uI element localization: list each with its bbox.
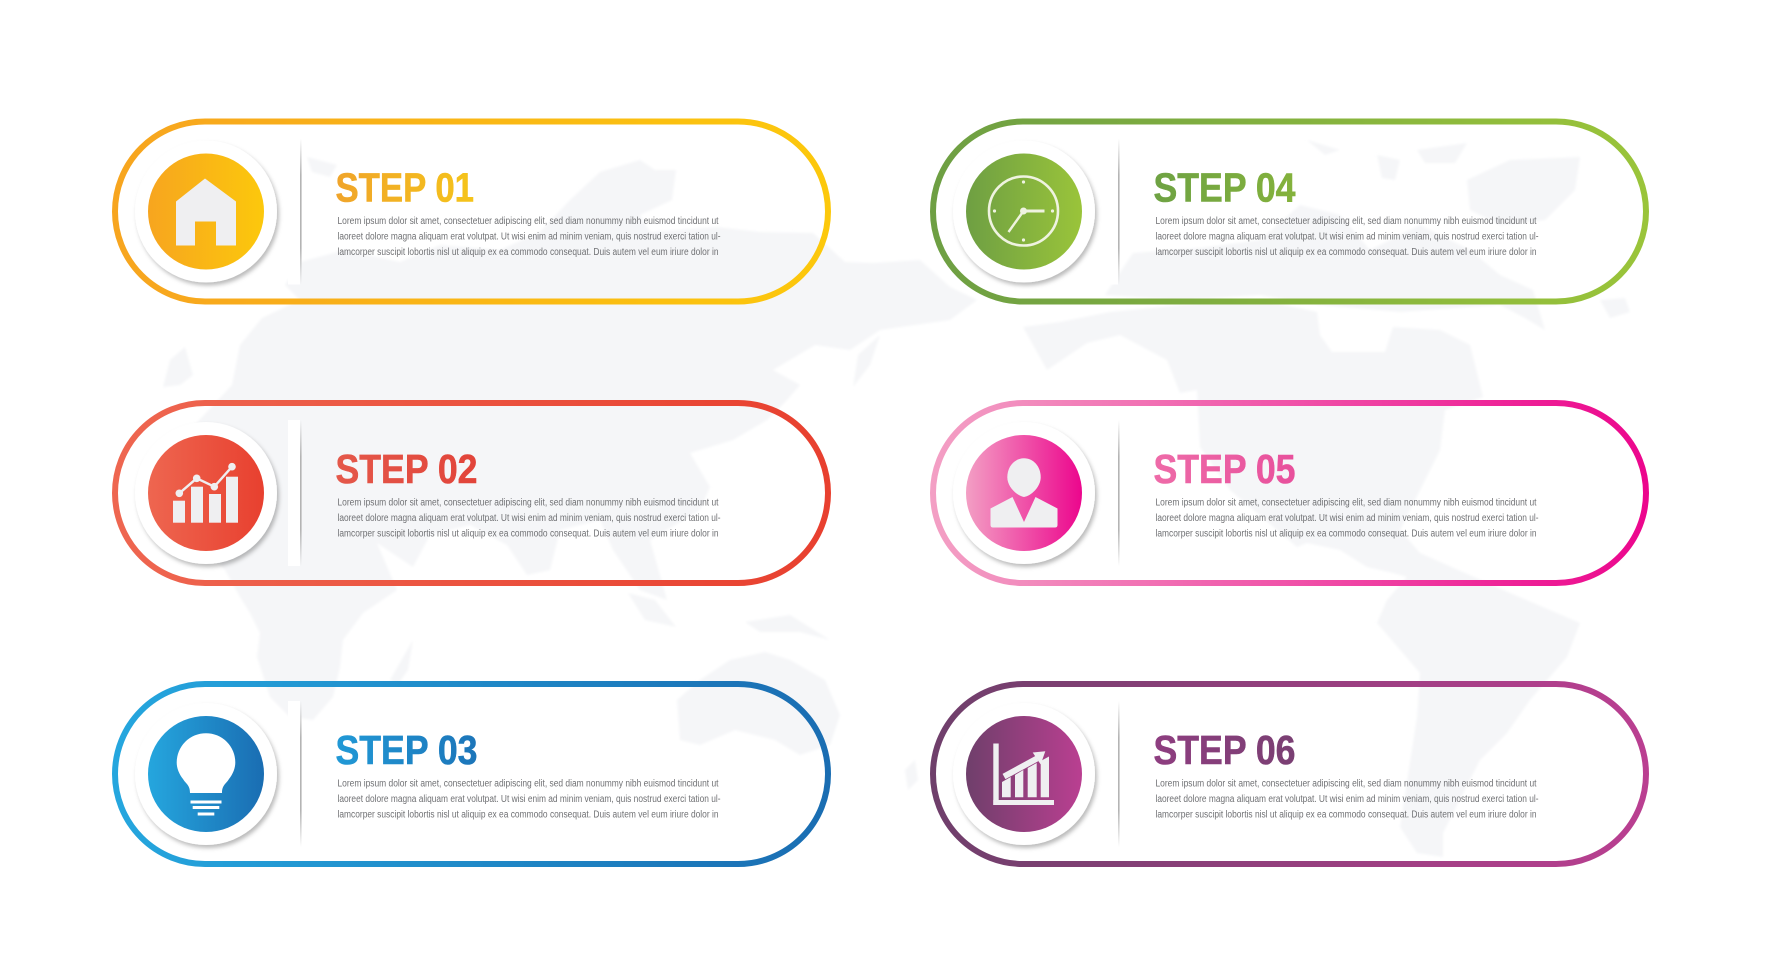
body text: laoreet dolore magna aliquam erat volutpat. Ut wisi enim ad minim veniam, quis nostrud exerci tation ul- [338, 513, 720, 524]
divider [1106, 420, 1120, 566]
body text [338, 498, 720, 540]
icon: person [990, 458, 1058, 528]
body text: Lorem ipsum dolor sit amet, consectetuer adipiscing elit, sed diam nonummy nibh euismod tincidunt ut [1156, 778, 1537, 790]
heading: STEP 03 [336, 727, 478, 773]
panel: step 04 [933, 122, 1646, 302]
icon circle [966, 435, 1082, 551]
icon: bar chart with line [173, 463, 238, 523]
icon: growth chart with arrow [993, 744, 1054, 805]
body text: lamcorper suscipit lobortis nisl ut aliquip ex ea commodo consequat. Duis autem vel eum iriure dolor in [1156, 528, 1536, 540]
divider [288, 701, 302, 847]
pill outline [115, 684, 828, 864]
body text: Lorem ipsum dolor sit amet, consectetuer adipiscing elit, sed diam nonummy nibh euismod tincidunt ut [1156, 498, 1537, 508]
panel: step 03 [115, 684, 828, 864]
body text: Lorem ipsum dolor sit amet, consectetuer adipiscing elit, sed diam nonummy nibh euismod tincidunt ut [338, 778, 719, 790]
icon circle [148, 435, 264, 551]
pill outline [115, 403, 828, 583]
heading: STEP 06 [1154, 727, 1296, 773]
panel: step 06 [933, 684, 1646, 864]
body text [1156, 778, 1538, 820]
icon ring [135, 140, 277, 282]
background world map [163, 140, 1630, 857]
divider [288, 138, 302, 284]
panel: step 05 [933, 403, 1646, 583]
icon ring [953, 703, 1095, 845]
divider [1106, 138, 1120, 284]
heading: STEP 05 [1154, 446, 1296, 492]
body text: laoreet dolore magna aliquam erat volutpat. Ut wisi enim ad minim veniam, quis nostrud exerci tation ul- [338, 794, 720, 805]
divider [1106, 701, 1120, 847]
icon ring [135, 703, 277, 845]
icon ring [953, 422, 1095, 564]
pill outline [933, 122, 1646, 302]
icon circle [148, 716, 264, 832]
pill outline [933, 684, 1646, 864]
divider [288, 420, 302, 566]
panel: step 01 [115, 122, 828, 302]
body text: lamcorper suscipit lobortis nisl ut aliquip ex ea commodo consequat. Duis autem vel eum iriure dolor in [338, 810, 718, 820]
body text [1156, 216, 1538, 258]
body text: Lorem ipsum dolor sit amet, consectetuer adipiscing elit, sed diam nonummy nibh euismod tincidunt ut [338, 498, 719, 508]
body text: lamcorper suscipit lobortis nisl ut aliquip ex ea commodo consequat. Duis autem vel eum iriure dolor in [338, 528, 718, 540]
body text: Lorem ipsum dolor sit amet, consectetuer adipiscing elit, sed diam nonummy nibh euismod tincidunt ut [338, 216, 719, 227]
heading: STEP 02 [336, 446, 478, 492]
body text: laoreet dolore magna aliquam erat volutpat. Ut wisi enim ad minim veniam, quis nostrud exerci tation ul- [1156, 794, 1538, 805]
body text: lamcorper suscipit lobortis nisl ut aliquip ex ea commodo consequat. Duis autem vel eum iriure dolor in [1156, 247, 1536, 258]
panel: step 02 [115, 403, 828, 583]
body text [1156, 498, 1538, 540]
body text: lamcorper suscipit lobortis nisl ut aliquip ex ea commodo consequat. Duis autem vel eum iriure dolor in [1156, 810, 1536, 820]
body text [338, 216, 720, 258]
pill outline [115, 122, 828, 302]
icon: clock [989, 176, 1058, 246]
icon circle [966, 716, 1082, 832]
pill outline [933, 403, 1646, 583]
body text [338, 778, 720, 820]
icon ring [953, 140, 1095, 282]
icon ring [135, 422, 277, 564]
body text: Lorem ipsum dolor sit amet, consectetuer adipiscing elit, sed diam nonummy nibh euismod tincidunt ut [1156, 216, 1537, 227]
body text: lamcorper suscipit lobortis nisl ut aliquip ex ea commodo consequat. Duis autem vel eum iriure dolor in [338, 247, 718, 258]
heading: STEP 01 [336, 164, 474, 210]
icon circle [148, 154, 264, 270]
heading: STEP 04 [1154, 164, 1296, 210]
body text: laoreet dolore magna aliquam erat volutpat. Ut wisi enim ad minim veniam, quis nostrud exerci tation ul- [1156, 232, 1538, 242]
icon: light bulb [177, 733, 235, 816]
icon: house [176, 178, 236, 246]
body text: laoreet dolore magna aliquam erat volutpat. Ut wisi enim ad minim veniam, quis nostrud exerci tation ul- [338, 232, 720, 242]
body text: laoreet dolore magna aliquam erat volutpat. Ut wisi enim ad minim veniam, quis nostrud exerci tation ul- [1156, 513, 1538, 524]
icon circle [966, 154, 1082, 270]
